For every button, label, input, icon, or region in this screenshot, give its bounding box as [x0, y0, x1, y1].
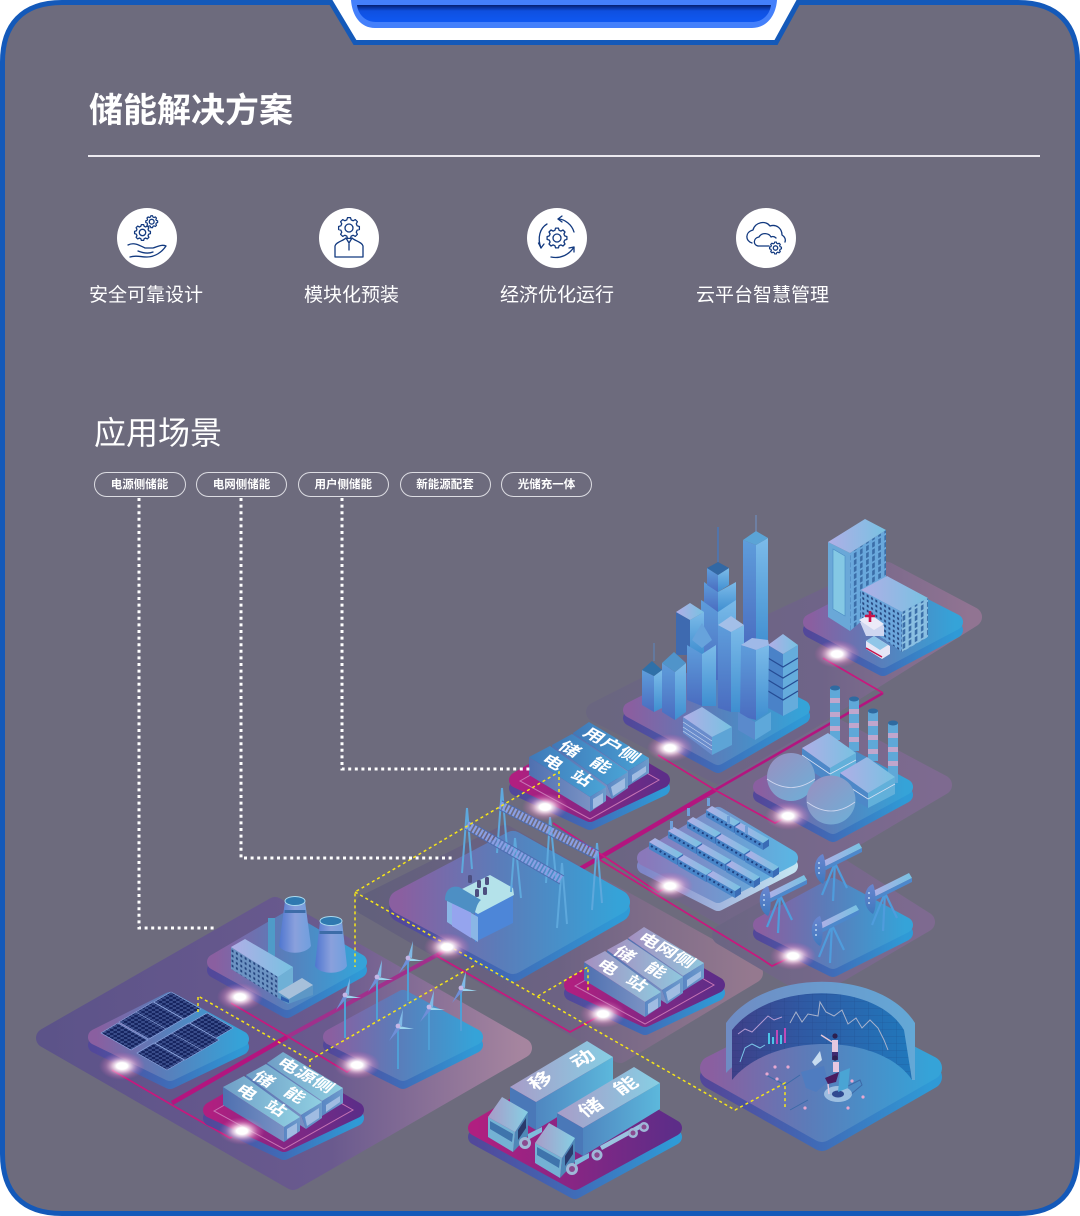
platform: oil field: [760, 843, 912, 969]
container label: 站: 站: [567, 767, 597, 789]
container group: [584, 927, 704, 1017]
platform: source-side storage station: [211, 1052, 356, 1152]
icon: transformer: [445, 875, 514, 942]
glow nodes: [99, 640, 860, 1145]
truck label: 移: 移: [524, 1068, 558, 1094]
container label: 电: 电: [232, 1081, 262, 1103]
platform: mobile storage trucks: [476, 1041, 674, 1191]
icon: chimney: [268, 918, 275, 956]
label: 经济优化运行: [500, 285, 614, 306]
platform: hospital: [811, 519, 955, 668]
icon: plant building: [231, 939, 313, 1004]
container label: 能: 能: [641, 959, 671, 981]
platform: control center: [712, 982, 930, 1139]
icon: cooling tower 1: [279, 896, 311, 953]
panel: oil zone: [722, 868, 925, 988]
icon: cooling tower 2: [315, 916, 347, 973]
curved screen wall: [726, 982, 915, 1080]
container group: [223, 1052, 343, 1142]
icon: ambulance: [866, 636, 890, 659]
power lines: [112, 658, 883, 1138]
icon: wind turbines: [336, 941, 477, 1069]
container label: 储: 储: [555, 738, 585, 760]
truck label: 储: 储: [574, 1095, 608, 1121]
truck label: 动: 动: [566, 1046, 600, 1072]
icon: cloud with gear: [736, 208, 796, 268]
container label: 储: 储: [610, 943, 640, 965]
platform: light industry: [645, 798, 790, 903]
tag: source side: [94, 472, 186, 496]
tag: grid side: 电网侧储能: [213, 479, 270, 491]
tag: source side: 电源侧储能: [111, 479, 168, 491]
tag: PV storage: 光储充一体: [518, 479, 575, 491]
icon: pumpjacks: [760, 843, 912, 963]
icon: storage blocks: [802, 733, 895, 808]
feature: economic operation: [500, 208, 614, 306]
icon: hand with gears: [117, 208, 177, 268]
floor circuit: [765, 1065, 865, 1110]
icon: pylons and lattice: [462, 788, 602, 928]
container label: 能: 能: [586, 754, 616, 776]
label: 安全可靠设计: [89, 285, 203, 306]
panel: city and hospital zone: [596, 572, 972, 775]
yellow dashed data links: [198, 772, 785, 1110]
icon: gear with cycle arrows: [527, 208, 587, 268]
label: 云平台智慧管理: [696, 285, 829, 306]
icon: hospital buildings: [828, 519, 928, 659]
title divider: [88, 155, 1040, 157]
truck label: 能: 能: [609, 1073, 643, 1099]
container label: 电: 电: [538, 751, 568, 773]
panel: industry zone: [618, 728, 942, 915]
white dotted leader lines: [139, 498, 530, 928]
container group: [529, 722, 649, 812]
platform: solar array: [96, 992, 241, 1081]
heading: application scenarios: 应用场景: [94, 415, 222, 451]
tag: new energy: [400, 472, 490, 496]
platform: chemical plant: [761, 686, 905, 834]
container label: 电网侧: 电网侧: [634, 930, 699, 971]
container label: 站: 站: [622, 972, 652, 994]
tag: PV storage: [501, 472, 592, 496]
feature: safe and reliable: [89, 208, 203, 306]
panel: power side zone: [46, 907, 522, 1180]
line charts: [738, 1002, 888, 1062]
platform: transformer substation: [401, 843, 618, 970]
icon: skyscrapers: [642, 515, 798, 755]
feature: modular prefab: [304, 208, 399, 306]
platform: wind farm: [331, 998, 475, 1081]
tag: user side: [298, 472, 389, 496]
top tab: [351, 0, 777, 28]
container label: 储: 储: [249, 1068, 279, 1090]
icon: solar panels: [101, 992, 233, 1070]
icon: spherical tanks: [767, 753, 856, 824]
container label: 能: 能: [280, 1084, 310, 1106]
platform: thermal plant: [215, 896, 359, 1010]
icon: factory sheds: [649, 798, 779, 898]
label: 模块化预装: [304, 285, 399, 306]
container label: 电: 电: [593, 956, 623, 978]
platform: grid-side storage station: [572, 927, 717, 1027]
tag: user side: 用户侧储能: [314, 479, 372, 491]
tag: new energy: 新能源配套: [416, 479, 474, 491]
feature: cloud management: [696, 208, 829, 306]
container label: 用户侧: 用户侧: [579, 724, 645, 766]
panel: grid side zone: [365, 835, 753, 1053]
title: 储能解决方案: [89, 92, 293, 130]
container label: 站: 站: [261, 1097, 291, 1119]
icon: desk and people: [801, 1033, 852, 1102]
icon: clinic entrance: [859, 611, 884, 636]
icon: person gear: [319, 208, 379, 268]
tag: grid side: [196, 472, 287, 496]
icon: truck 2: [535, 1067, 660, 1178]
icon: truck 1: [488, 1041, 613, 1152]
bar chart: [768, 1028, 786, 1044]
platform: user-side storage station: [517, 722, 662, 822]
platform: city: [631, 515, 802, 765]
icon: striped chimneys: [830, 686, 898, 783]
container label: 电源侧: 电源侧: [273, 1055, 338, 1096]
